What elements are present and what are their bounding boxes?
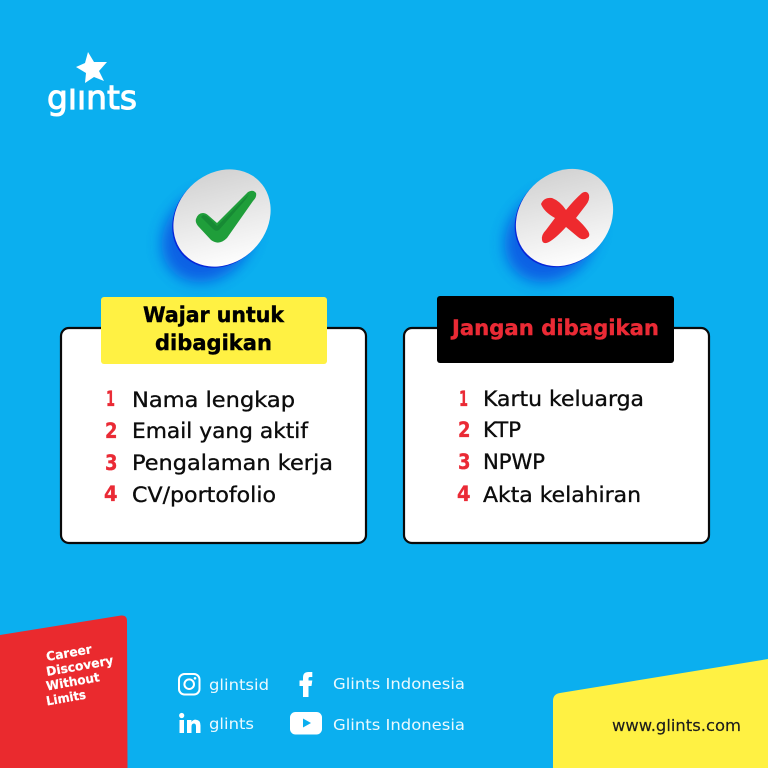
footer panel: yellow website (553, 659, 768, 768)
footer panel: red tagline: Career (45, 641, 94, 664)
heading badge: wajar untuk dibagikan: Wajar untuk (143, 303, 285, 327)
list: jangan dibagikan: KTP (483, 418, 521, 443)
list: jangan dibagikan: 2 (458, 418, 470, 443)
social: instagram: glintsid (209, 676, 269, 694)
list: jangan dibagikan: 4 (457, 482, 470, 507)
footer panel: red tagline: Discovery (45, 652, 114, 679)
list: wajar untuk dibagikan: 4 (104, 482, 118, 507)
list: jangan dibagikan: 1 (459, 387, 468, 412)
social: youtube (290, 712, 465, 734)
logo: glints (47, 52, 137, 117)
social: linkedin (179, 713, 254, 733)
icon: green check button (143, 149, 291, 301)
logo: glints: glints (47, 78, 137, 117)
list: wajar untuk dibagikan: Nama lengkap (132, 388, 295, 413)
social: facebook: Glints Indonesia (333, 675, 465, 693)
list: jangan dibagikan: 3 (458, 450, 470, 475)
list: wajar untuk dibagikan: Pengalaman kerja (132, 451, 333, 476)
list: jangan dibagikan: Kartu keluarga (483, 387, 644, 412)
list: wajar untuk dibagikan: 3 (105, 451, 118, 476)
list: jangan dibagikan: Akta kelahiran (483, 483, 641, 508)
icon: red cross button (486, 149, 633, 301)
list: jangan dibagikan (457, 387, 644, 508)
social: linkedin: glints (209, 715, 254, 733)
panel: wajar untuk dibagikan (61, 297, 366, 543)
social: instagram (179, 674, 269, 694)
heading badge: wajar untuk dibagikan (101, 297, 327, 364)
social: facebook (300, 672, 465, 697)
list: wajar untuk dibagikan: CV/portofolio (132, 483, 276, 508)
list: wajar untuk dibagikan: 1 (106, 387, 115, 412)
footer panel: yellow website: www.glints.com (612, 716, 741, 735)
list: wajar untuk dibagikan: Email yang aktif (132, 419, 308, 444)
heading badge: wajar untuk dibagikan: dibagikan (155, 331, 272, 355)
panel: jangan dibagikan (404, 296, 709, 543)
social: youtube: Glints Indonesia (333, 716, 465, 734)
list: wajar untuk dibagikan (104, 387, 333, 508)
footer panel: red tagline: Limits (45, 687, 87, 708)
heading badge: jangan dibagikan (437, 296, 674, 363)
list: wajar untuk dibagikan: 2 (105, 419, 118, 444)
list: jangan dibagikan: NPWP (483, 450, 545, 475)
heading badge: jangan dibagikan: Jangan dibagikan (450, 316, 659, 340)
footer panel: red tagline (0, 615, 128, 768)
footer panel: red tagline: Without (45, 669, 101, 693)
